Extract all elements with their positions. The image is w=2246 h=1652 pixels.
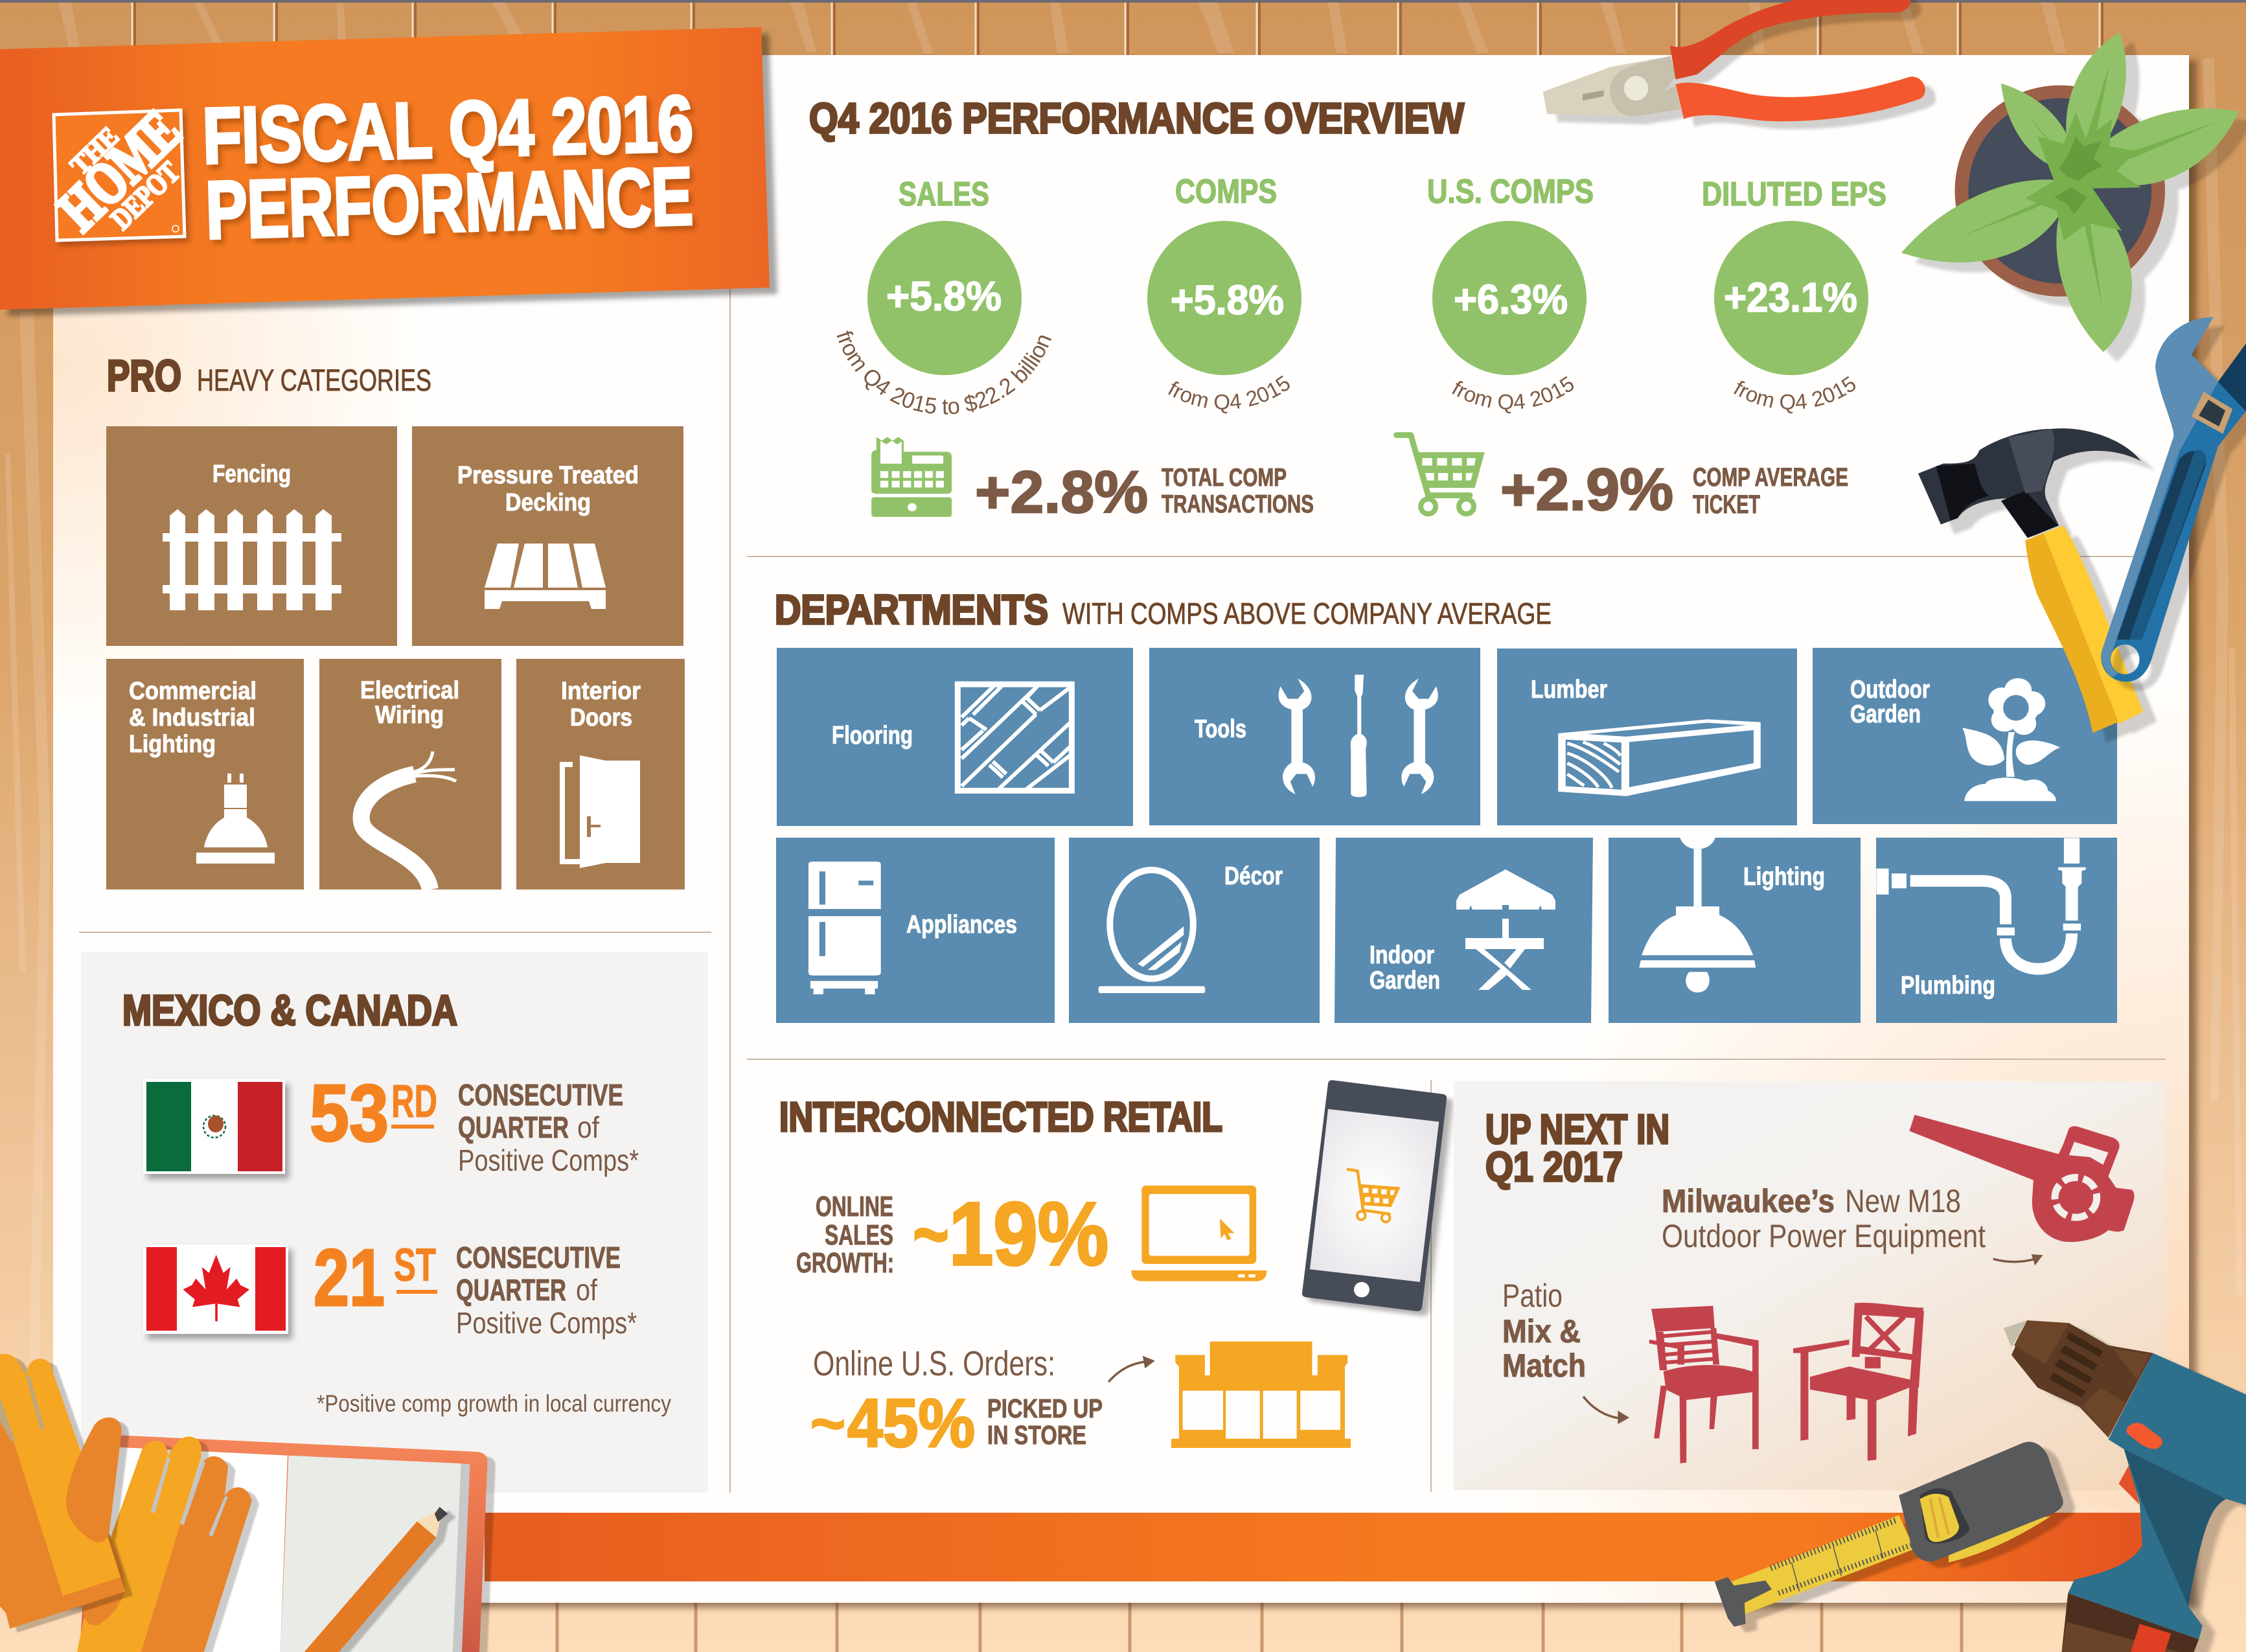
icon: door [562, 755, 640, 868]
icon: tools [1279, 675, 1438, 797]
icon: store [1171, 1342, 1351, 1448]
tile: interior doors: Interior [561, 678, 641, 705]
kpi: comps: COMPS [1175, 173, 1277, 211]
tile: appliances [776, 838, 1055, 1023]
stat: comp average ticket: TICKET [1693, 490, 1760, 519]
tile: tools: Tools [1195, 715, 1246, 743]
stat: comp average ticket: COMP AVERAGE [1693, 463, 1848, 492]
kpi: diluted eps: DILUTED EPS [1702, 176, 1886, 213]
icon: leaf blower [1909, 1115, 2134, 1242]
kpi: sales: SALES [899, 176, 989, 213]
icon: shopping cart [1397, 435, 1485, 514]
stat: total comp transactions: TRANSACTIONS [1162, 490, 1314, 518]
kpi: comps: +5.8% [1171, 277, 1284, 323]
text: patio mix and match: Match [1502, 1348, 1586, 1384]
tile: fencing [106, 426, 397, 646]
tile: plumbing: Plumbing [1901, 972, 1995, 1000]
illustration: drill [2004, 1320, 2246, 1652]
arrow: to store [1108, 1356, 1155, 1382]
kpi: diluted eps: +23.1% [1724, 274, 1857, 321]
stat: canada 21st: Positive Comps* [456, 1306, 637, 1340]
stat: online sales growth: ONLINE [816, 1191, 893, 1222]
stat: picked up in store: PICKED UP [987, 1394, 1103, 1423]
tile: fencing: Fencing [212, 461, 291, 488]
stat: canada 21st: CONSECUTIVE [456, 1241, 621, 1274]
tile: lumber [1497, 648, 1797, 825]
banner [0, 27, 770, 310]
stat: online sales growth: GROWTH: [796, 1247, 894, 1279]
stat: comp average ticket [1397, 435, 1848, 523]
icon: refrigerator [808, 862, 881, 994]
tile: indoor garden: Garden [1369, 967, 1440, 994]
tile: commercial and industrial lighting [106, 659, 304, 889]
icon: laptop [1131, 1186, 1266, 1281]
icon: wire [361, 751, 456, 889]
icon: flower [1962, 678, 2060, 801]
title: FISCAL Q4 2016 [201, 79, 694, 180]
footer orange bar [485, 1513, 2143, 1581]
stat: mexico 53rd: Positive Comps* [458, 1143, 639, 1177]
panel: up next in q1 2017 [1454, 1081, 2166, 1490]
panel: mexico and canada [81, 952, 708, 1493]
stat: online sales growth [796, 1184, 1108, 1284]
tile: tools [1149, 648, 1480, 825]
text: milwaukee outdoor power equipment: Outdoor Power Equipment [1662, 1218, 1986, 1254]
footnote: *Positive comp growth in local currency [317, 1390, 671, 1417]
stat: canada 21st: QUARTER [456, 1273, 566, 1307]
glove: left [0, 1354, 126, 1629]
tile: indoor garden [1335, 838, 1593, 1023]
tile: decor [1069, 838, 1320, 1023]
tile: electrical wiring: Wiring [375, 702, 444, 729]
icon: flooring [957, 684, 1071, 791]
stat: picked up in store: ~ [810, 1385, 846, 1462]
tile: pressure treated decking: Decking [505, 489, 591, 516]
title: PERFORMANCE [205, 150, 694, 256]
tile: outdoor garden: Garden [1850, 700, 1921, 728]
tile: pressure treated decking [412, 426, 683, 646]
stat: mexico 53rd: QUARTER [458, 1110, 569, 1144]
illustration: notebook and pencil [79, 1436, 488, 1652]
icon: mirror [1099, 870, 1205, 993]
kpi: us comps: U.S. COMPS [1427, 173, 1594, 211]
heading: overview: Q4 2016 PERFORMANCE OVERVIEW [809, 94, 1465, 142]
icon: patio chairs [1649, 1303, 1924, 1463]
heading: up next: UP NEXT IN [1485, 1106, 1669, 1153]
tile: commercial and industrial lighting: Commercial [129, 678, 257, 705]
illustration: gloves [0, 1354, 252, 1652]
icon: spot lamp [196, 774, 275, 864]
text: milwaukee outdoor power equipment: Milwaukee’s [1662, 1183, 1835, 1219]
icon: smartphone [1302, 1080, 1447, 1311]
stat: comp average ticket: +2.9% [1500, 457, 1673, 523]
tile: lumber: Lumber [1531, 676, 1607, 704]
kpi: us comps [1427, 173, 1594, 413]
logo: the home depot: THE [65, 122, 125, 181]
panel: pro heavy categories [106, 351, 685, 889]
stat: picked up in store [810, 1385, 1103, 1462]
text: patio mix and match [1502, 1278, 1586, 1384]
kpi: comps [1147, 173, 1301, 413]
stat: mexico 53rd: of [577, 1110, 599, 1144]
stat: total comp transactions [871, 437, 1314, 525]
tile: interior doors: Doors [570, 704, 632, 731]
stat: canada 21st [314, 1233, 637, 1340]
glove: right [76, 1437, 252, 1652]
stat: picked up in store: 45% [847, 1385, 975, 1462]
heading: pro: PRO [107, 351, 181, 400]
tile: commercial and industrial lighting: Lighting [129, 731, 216, 758]
text: patio mix and match: Patio [1502, 1278, 1563, 1314]
tile: lighting [1609, 834, 1861, 1023]
section dividers [79, 285, 2166, 1493]
stat: online sales growth: ~ [912, 1184, 950, 1284]
tile: flooring [777, 648, 1133, 826]
stat: canada 21st: 21 [314, 1233, 385, 1323]
logo: the home depot: DEPOT [104, 155, 186, 236]
heading: up next: Q1 2017 [1485, 1143, 1623, 1190]
panel: interconnected retail [779, 1080, 1447, 1462]
kpi: sales: +5.8% [886, 273, 1002, 319]
tile: pressure treated decking: Pressure Treated [457, 462, 639, 489]
panel: departments [775, 586, 2117, 1023]
text: milwaukee outdoor power equipment: New M18 [1845, 1183, 1961, 1219]
heading: up next [1485, 1106, 1669, 1190]
tile: interior doors [516, 659, 685, 889]
tile: plumbing [1876, 838, 2117, 1023]
arrow: to blower [1993, 1254, 2043, 1265]
kpi: us comps: from Q4 2015 [1452, 376, 1574, 413]
stat: online sales growth: SALES [825, 1219, 893, 1251]
flag: mexico [143, 1079, 285, 1174]
kpi: diluted eps: from Q4 2015 [1734, 376, 1855, 413]
illustration: pliers [1543, 0, 1925, 121]
text: milwaukee outdoor power equipment [1662, 1183, 1986, 1254]
stat: mexico 53rd: RD [391, 1076, 437, 1127]
tile: indoor garden: Indoor [1369, 941, 1434, 969]
heading: departments: WITH COMPS ABOVE COMPANY AVERAGE [1062, 597, 1552, 630]
stat: mexico 53rd: 53 [310, 1069, 389, 1158]
illustration: wrench [2101, 317, 2246, 682]
kpi: comps: from Q4 2015 [1168, 376, 1290, 413]
tile: electrical wiring: Electrical [360, 677, 459, 704]
tile: appliances: Appliances [906, 911, 1017, 939]
heading: pro: HEAVY CATEGORIES [197, 363, 431, 397]
stat: total comp transactions: TOTAL COMP [1162, 464, 1287, 492]
stat: picked up in store: IN STORE [987, 1420, 1086, 1450]
kpi: us comps: +6.3% [1454, 276, 1568, 323]
stat: online sales growth: 19% [949, 1184, 1108, 1284]
tile: outdoor garden [1813, 648, 2117, 824]
text: patio mix and match: Mix & [1502, 1313, 1581, 1349]
stat: canada 21st: ST [394, 1240, 436, 1291]
icon: plumbing trap [1876, 838, 2086, 969]
illustration: potted plant [1901, 32, 2239, 352]
icon: lumber [1558, 719, 1761, 796]
heading: departments: DEPARTMENTS [775, 586, 1048, 633]
heading: departments [775, 586, 1552, 633]
illustration: hammer [1918, 428, 2144, 733]
kpi: diluted eps [1702, 176, 1886, 413]
panel: performance overview [809, 68, 1912, 525]
illustration: tape measure [1715, 1442, 2063, 1627]
title [201, 79, 694, 256]
icon: cash register [871, 437, 952, 517]
heading: pro [107, 351, 431, 400]
flag: canada [143, 1245, 288, 1334]
icon: fence [163, 509, 341, 610]
tile: lighting: Lighting [1743, 863, 1825, 891]
logo: the home depot: HOME [45, 97, 193, 243]
tile: decor: Décor [1224, 862, 1283, 890]
logo: the home depot [45, 97, 193, 243]
tile: commercial and industrial lighting: & Industrial [129, 704, 255, 731]
tile: flooring: Flooring [832, 722, 913, 750]
icon: pendant lamp [1639, 834, 1756, 992]
icon: decking [485, 544, 606, 609]
kpi: sales [837, 176, 1051, 415]
heading: interconnected retail: INTERCONNECTED RETAIL [779, 1094, 1222, 1140]
tile: electrical wiring [319, 659, 501, 889]
text: online us orders: Online U.S. Orders: [813, 1344, 1055, 1383]
kpi: sales: from Q4 2015 to $22.2 billion [837, 330, 1051, 415]
icon: patio table [1456, 869, 1555, 990]
tile: outdoor garden: Outdoor [1850, 676, 1930, 704]
stat: canada 21st: of [576, 1273, 597, 1307]
stat: total comp transactions: +2.8% [975, 459, 1148, 525]
arrow: to chairs [1583, 1397, 1629, 1424]
stat: mexico 53rd [310, 1069, 639, 1177]
stat: mexico 53rd: CONSECUTIVE [458, 1078, 623, 1112]
heading: mexico and canada: MEXICO & CANADA [122, 986, 457, 1034]
